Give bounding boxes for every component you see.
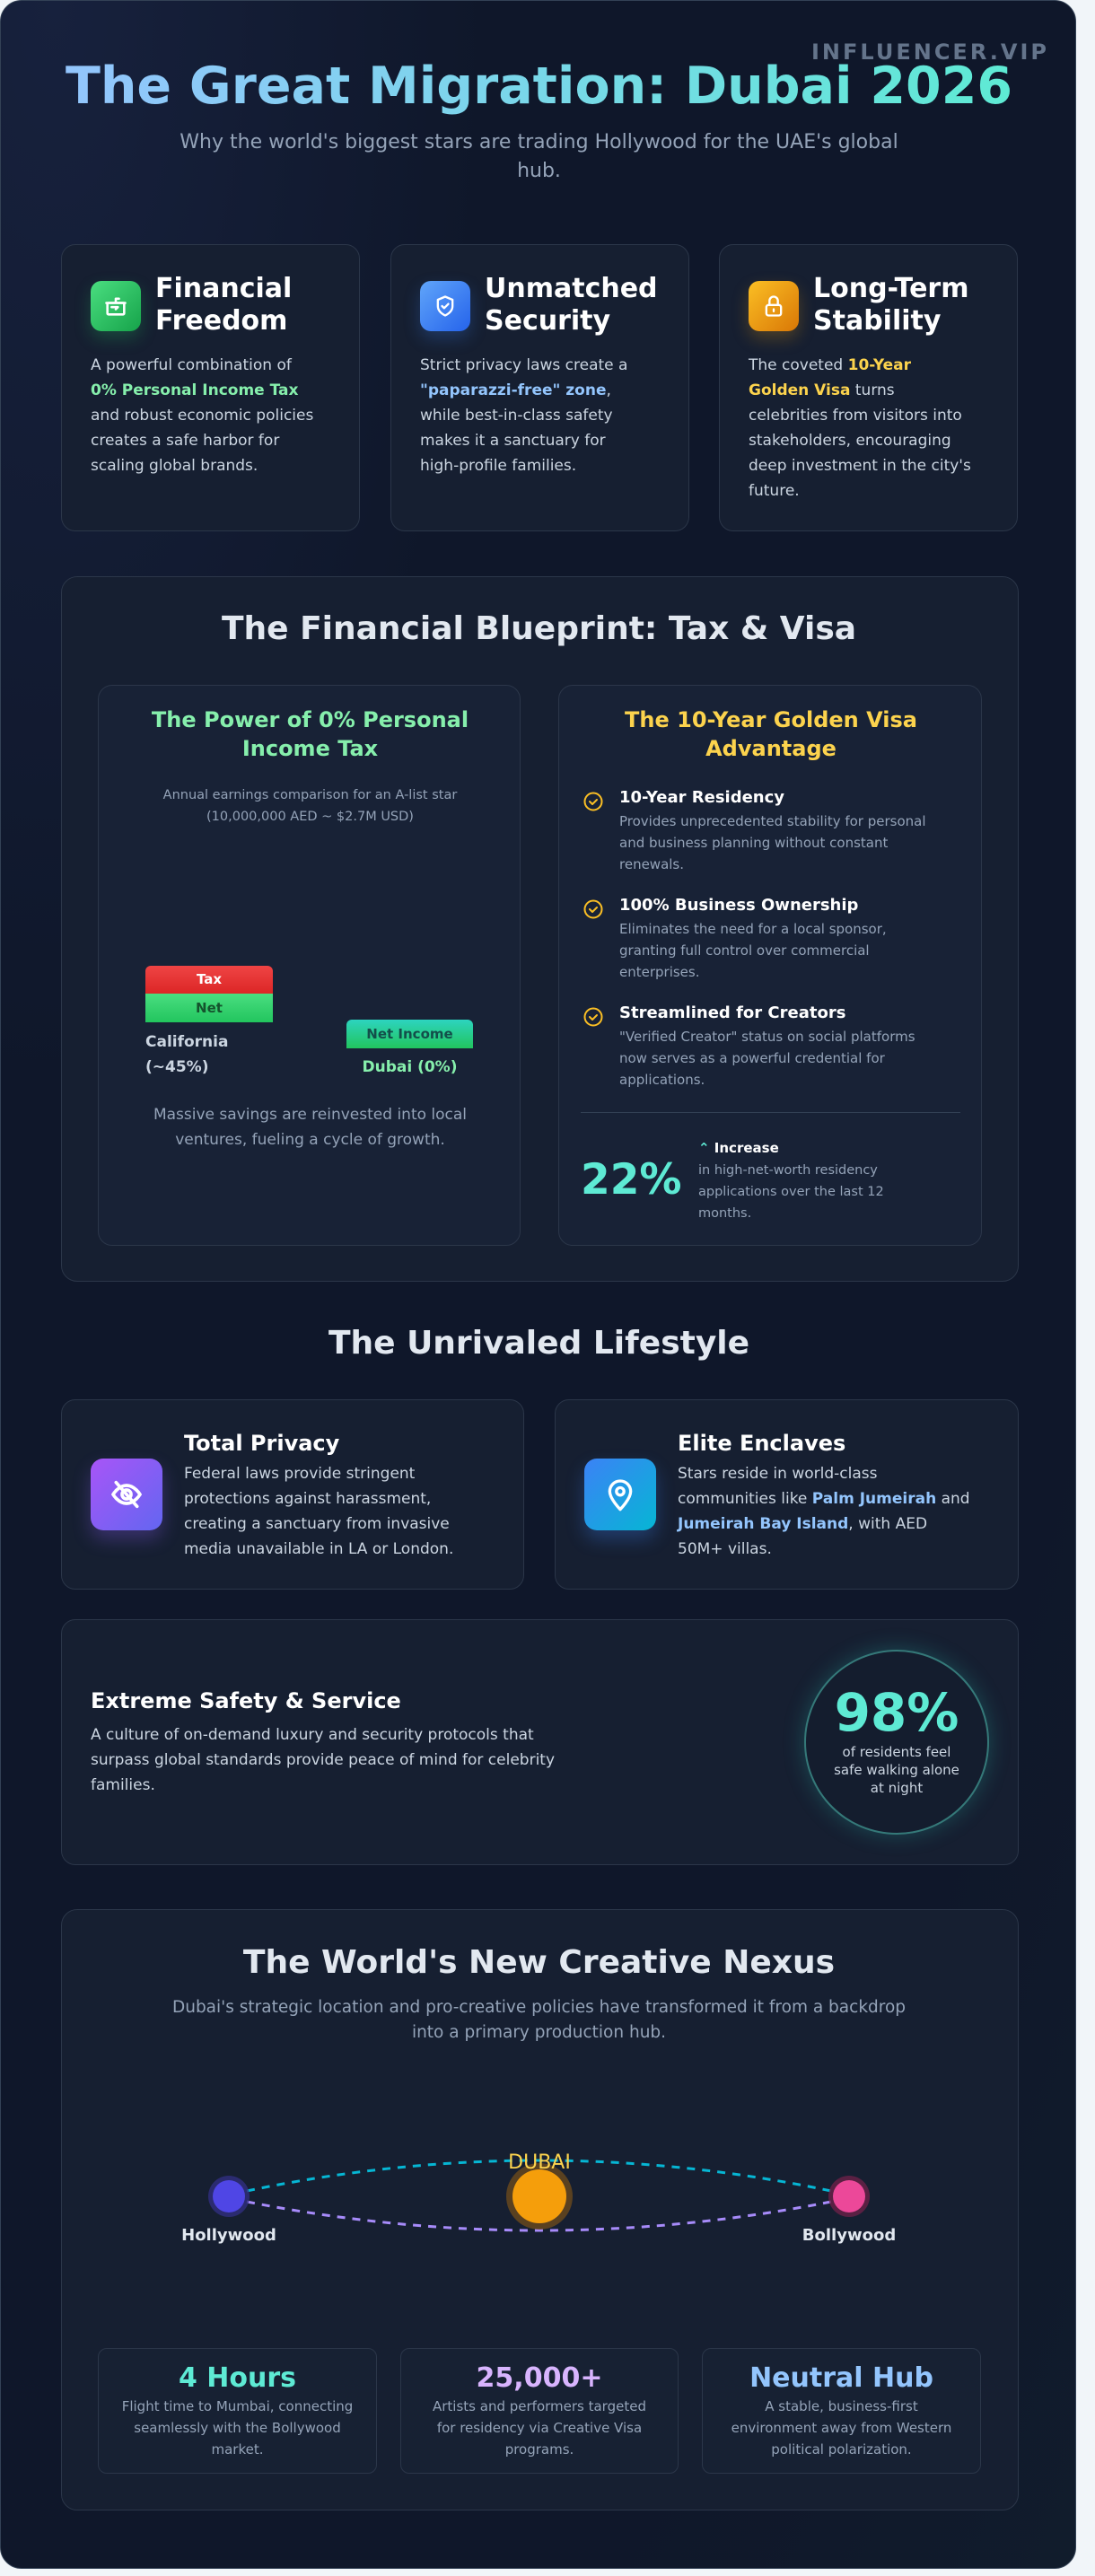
card: total privacy (61, 1399, 524, 1590)
stat: 22% increase: months. (698, 1206, 751, 1221)
heading: creative nexus: The World's New Creative Nexus (243, 1944, 835, 1981)
subtitle: hub. (517, 160, 561, 182)
label: california: (~45%) (145, 1058, 208, 1076)
item: residency: Provides unprecedented stability for personal (619, 813, 926, 829)
heading: Advantage (705, 736, 837, 761)
heading: financial blueprint: The Financial Blueprint: Tax & Visa (222, 610, 856, 647)
item: ownership: Eliminates the need for a local sponsor, (619, 921, 887, 937)
card: stability (719, 244, 1018, 531)
diagram: hollywood-dubai-bollywood: Bollywood (802, 2226, 896, 2245)
text: creates a safe harbor for (91, 432, 279, 450)
item: residency: 10-Year Residency (619, 788, 784, 807)
text: 0% Personal Income Tax (91, 381, 298, 399)
note: ventures, fueling a cycle of growth. (175, 1131, 445, 1149)
heading: Income Tax (242, 736, 378, 761)
label: california: California (145, 1033, 228, 1051)
diagram: hollywood-dubai-bollywood (181, 2151, 896, 2245)
stat: 22% increase (581, 1140, 884, 1221)
text: high-profile families. (420, 457, 576, 475)
heading: Total Privacy (184, 1431, 339, 1456)
text: surpass global standards provide peace of mind for celebrity (91, 1751, 555, 1769)
item: creators: now serves as a powerful credential for (619, 1050, 885, 1066)
subtitle: nexus: into a primary production hub. (412, 2023, 666, 2042)
item: residency (583, 788, 926, 872)
text (91, 356, 313, 475)
text: deep investment in the city's (749, 457, 971, 475)
heading (155, 273, 292, 337)
heading: Extreme Safety & Service (91, 1688, 401, 1713)
text (91, 1726, 555, 1794)
stat circle: 98% (804, 1650, 989, 1835)
text: Jumeirah Bay Island, with AED (678, 1515, 927, 1533)
card: elite enclaves (555, 1399, 1019, 1590)
stat: neutral hub: political polarization. (771, 2441, 912, 2458)
icon: lock (749, 281, 799, 331)
label: california (145, 1033, 228, 1076)
item: creators: "Verified Creator" status on social platforms (619, 1029, 915, 1045)
icon: eye-off (91, 1459, 162, 1530)
stat: neutral hub: Neutral Hub (749, 2362, 933, 2394)
text: media unavailable in LA or London. (184, 1540, 453, 1558)
bar chart (145, 966, 473, 1076)
heading: Stability (813, 305, 941, 337)
stat: 4 hours: market. (211, 2441, 264, 2458)
heading: lifestyle: The Unrivaled Lifestyle (328, 1325, 749, 1362)
subtitle (180, 131, 898, 182)
note: Massive savings are reinvested into local (153, 1106, 467, 1124)
stat circle: 98%: safe walking alone (834, 1762, 959, 1778)
heading (625, 707, 917, 761)
bar: dubai: Net Income (366, 1026, 453, 1042)
subtitle: Why the world's biggest stars are trading Hollywood for the UAE's global (180, 131, 898, 153)
text: 50M+ villas. (678, 1540, 772, 1558)
text (749, 356, 971, 500)
item: ownership (583, 896, 887, 980)
heading: Freedom (155, 305, 287, 337)
text: families. (91, 1776, 155, 1794)
text: Federal laws provide stringent (184, 1465, 415, 1483)
heading: Financial (155, 273, 292, 304)
heading: Long-Term (813, 273, 968, 304)
stat circle: 98%: of residents feel (843, 1744, 950, 1760)
stat: 25,000+: Artists and performers targeted (433, 2398, 646, 2414)
item: residency: renewals. (619, 856, 684, 872)
heading (813, 273, 968, 337)
text: future. (749, 482, 800, 500)
panel: financial blueprint (61, 576, 1019, 1282)
heading (485, 273, 658, 337)
bar: california (145, 966, 273, 1022)
stat: 22% increase: in high-net-worth residency (698, 1163, 878, 1178)
diagram: hollywood-dubai-bollywood: DUBAI (508, 2151, 571, 2174)
heading (152, 707, 469, 761)
item: creators (583, 1003, 915, 1088)
text: creating a sanctuary from invasive (184, 1515, 450, 1533)
text (184, 1465, 453, 1558)
heading: Security (485, 305, 610, 337)
stat: 25,000+: for residency via Creative Visa (437, 2420, 642, 2436)
item: residency: and business planning without constant (619, 835, 888, 851)
stat circle: 98%: at night (871, 1780, 923, 1796)
subtitle: nexus: Dubai's strategic location and pro-creative policies have transformed it from a backdrop (172, 1998, 906, 2017)
stat: 4 hours (98, 2348, 377, 2474)
panel: golden visa (558, 685, 982, 1246)
card: safety (61, 1619, 1019, 1865)
text: A powerful combination of (91, 356, 292, 374)
bar: california: Net (196, 1000, 223, 1016)
stat circle: 98%: 98% (835, 1682, 959, 1743)
caption: (10,000,000 AED ~ $2.7M USD) (206, 810, 414, 824)
text: "paparazzi-free" zone, (420, 381, 611, 399)
heading: The Power of 0% Personal (152, 707, 469, 732)
text: makes it a sanctuary for (420, 432, 606, 450)
title: The Great Migration: Dubai 2026 (66, 57, 1012, 116)
icon: gift box (91, 281, 141, 331)
item: creators: Streamlined for Creators (619, 1003, 845, 1022)
text: Golden Visa turns (749, 381, 895, 399)
text: while best-in-class safety (420, 407, 613, 425)
caption: Annual earnings comparison for an A-list star (163, 788, 457, 802)
label: dubai: Dubai (0%) (362, 1058, 458, 1076)
text: The coveted 10-Year (749, 356, 911, 374)
heading: The 10-Year Golden Visa (625, 707, 917, 732)
text: Strict privacy laws create a (420, 356, 627, 374)
text (420, 356, 627, 475)
heading: Elite Enclaves (678, 1431, 845, 1456)
stat: 25,000+: programs. (505, 2441, 574, 2458)
icon: shield (420, 281, 470, 331)
card: financial freedom (61, 244, 360, 531)
panel: creative nexus (61, 1909, 1019, 2510)
card: security (390, 244, 689, 531)
stat: 25,000+ (400, 2348, 679, 2474)
stat: neutral hub (702, 2348, 981, 2474)
stat: neutral hub: A stable, business-first (765, 2398, 918, 2414)
stat: neutral hub: environment away from Western (731, 2420, 951, 2436)
note (153, 1106, 467, 1149)
text: Stars reside in world-class (678, 1465, 877, 1483)
text: communities like Palm Jumeirah and (678, 1490, 970, 1508)
text: A culture of on-demand luxury and security protocols that (91, 1726, 534, 1744)
stat: 4 hours: seamlessly with the Bollywood (134, 2420, 341, 2436)
text (677, 1465, 970, 1558)
icon: map pin (584, 1459, 656, 1530)
text: stakeholders, encouraging (749, 432, 951, 450)
stat: 22% increase: 22% (581, 1155, 682, 1205)
stat: 4 hours: Flight time to Mumbai, connecting (122, 2398, 353, 2414)
text: and robust economic policies (91, 407, 313, 425)
stat: 4 hours: 4 Hours (179, 2362, 296, 2394)
item: ownership: enterprises. (619, 964, 700, 980)
caption (163, 788, 458, 824)
diagram: hollywood-dubai-bollywood: Hollywood (181, 2226, 276, 2245)
bar: california: Tax (197, 971, 222, 987)
watermark: INFLUENCER.VIP (811, 39, 1049, 65)
panel: tax comparison (98, 685, 521, 1246)
text: scaling global brands. (91, 457, 258, 475)
item: creators: applications. (619, 1072, 705, 1088)
text: protections against harassment, (184, 1490, 431, 1508)
stat: 25,000+: 25,000+ (477, 2362, 602, 2394)
heading: Unmatched (485, 273, 658, 304)
item: ownership: granting full control over commercial (619, 942, 870, 959)
item: ownership: 100% Business Ownership (619, 896, 858, 915)
stat: 22% increase: ⌃ Increase (698, 1140, 779, 1156)
bar: dubai (346, 1020, 473, 1048)
stat: 22% increase: applications over the last 12 (698, 1185, 884, 1199)
subtitle: nexus (172, 1998, 906, 2042)
text: celebrities from visitors into (749, 407, 962, 425)
